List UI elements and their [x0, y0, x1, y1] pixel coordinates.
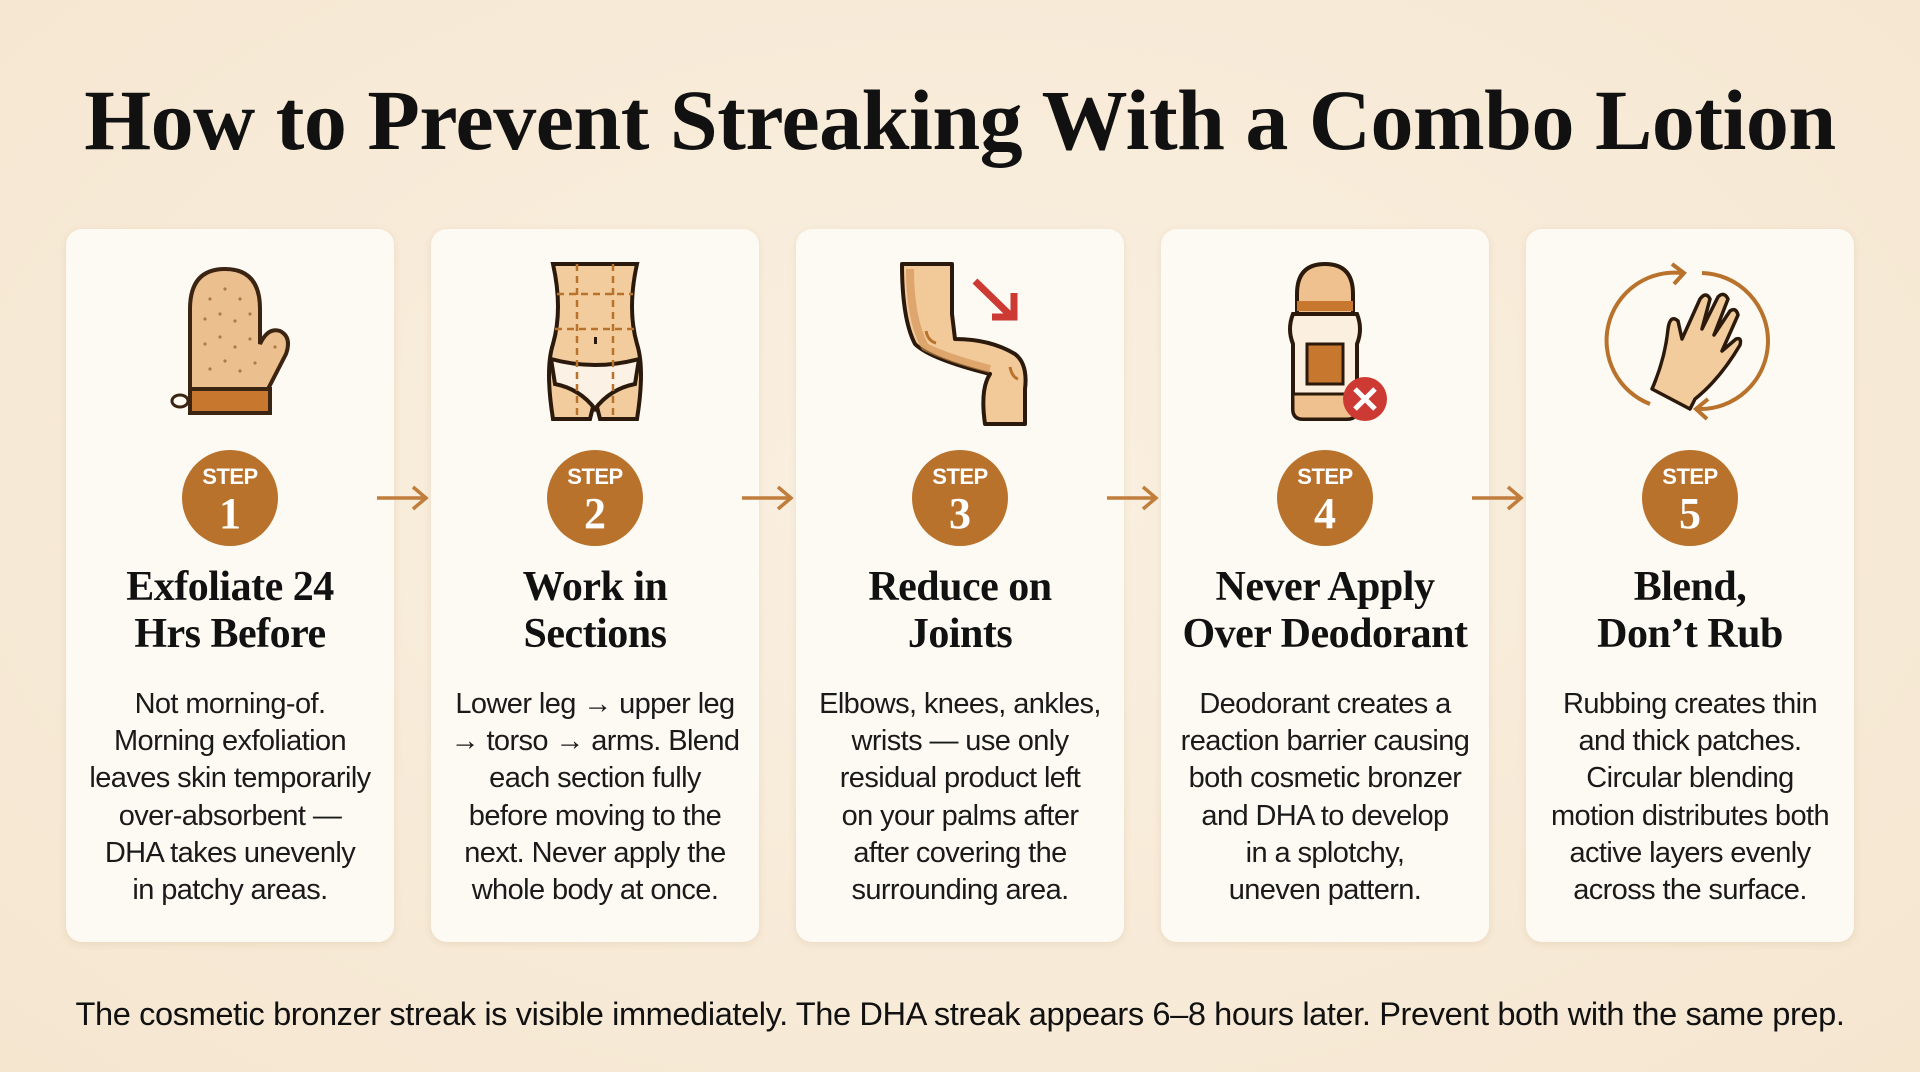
- body text: Rubbing creates thin: [1563, 688, 1817, 720]
- heading: Never Apply: [1216, 564, 1434, 610]
- icon: torso sections: [547, 262, 643, 421]
- icon: elbow/knee joints: [900, 262, 1028, 426]
- panel: step 2: [431, 229, 759, 942]
- body text: Lower leg → upper leg: [455, 688, 735, 720]
- step badge 3: STEP: [932, 464, 988, 489]
- body text: Not morning-of.: [135, 688, 325, 720]
- step badge 1: STEP: [202, 464, 258, 489]
- body text: across the surface.: [1573, 874, 1807, 906]
- step badge 5: [1642, 450, 1738, 546]
- body text: Elbows, knees, ankles,: [819, 688, 1101, 720]
- arrow 1: [377, 486, 429, 510]
- body text: active layers evenly: [1569, 837, 1811, 869]
- step badge 5: STEP: [1662, 464, 1718, 489]
- body text: [451, 688, 739, 906]
- icon: deodorant with X: [1288, 262, 1387, 421]
- body text: [89, 688, 371, 906]
- arrow 4: [1472, 486, 1524, 510]
- body text: whole body at once.: [472, 874, 718, 906]
- arrow 2: [742, 486, 794, 510]
- step badge 3: 3: [949, 489, 971, 538]
- heading: [126, 564, 334, 657]
- step badge 2: STEP: [567, 464, 623, 489]
- heading: Work in: [523, 564, 667, 610]
- heading: Reduce on: [868, 564, 1052, 610]
- panel: step 3: [796, 229, 1124, 942]
- body text: [819, 688, 1101, 906]
- body text: in patchy areas.: [132, 874, 328, 906]
- panel: step 4: [1161, 229, 1489, 942]
- step badge 4: [1277, 450, 1373, 546]
- body text: next. Never apply the: [464, 837, 726, 869]
- body text: [1551, 688, 1829, 906]
- body text: residual product left: [840, 762, 1080, 794]
- heading: Hrs Before: [134, 611, 326, 657]
- body text: reaction barrier causing: [1181, 725, 1469, 757]
- heading: [1597, 564, 1783, 657]
- body text: surrounding area.: [851, 874, 1069, 906]
- step badge 2: 2: [584, 489, 606, 538]
- step badge 3: [912, 450, 1008, 546]
- body text: over-absorbent —: [119, 800, 341, 832]
- heading: Exfoliate 24: [126, 564, 334, 610]
- heading: [523, 564, 668, 657]
- body text: motion distributes both: [1551, 800, 1829, 832]
- step badge 5: 5: [1679, 489, 1701, 538]
- heading: Over Deodorant: [1182, 611, 1468, 657]
- step badge 1: [182, 450, 278, 546]
- arrow 3: [1107, 486, 1159, 510]
- step badge 4: STEP: [1297, 464, 1353, 489]
- body text: and thick patches.: [1579, 725, 1801, 757]
- icon: exfoliating mitt: [170, 267, 290, 415]
- body text: leaves skin temporarily: [89, 762, 371, 794]
- body text: each section fully: [489, 762, 701, 794]
- step badge 4: 4: [1314, 489, 1336, 538]
- step badge 2: [547, 450, 643, 546]
- body text: DHA takes unevenly: [105, 837, 355, 869]
- body text: uneven pattern.: [1229, 874, 1421, 906]
- body text: before moving to the: [469, 800, 721, 832]
- step badge 1: 1: [219, 489, 241, 538]
- body text: Circular blending: [1586, 762, 1794, 794]
- heading: Blend,: [1634, 564, 1746, 610]
- heading: Sections: [524, 611, 666, 657]
- footer note: The cosmetic bronzer streak is visible immediately. The DHA streak appears 6–8 hours later. Prevent both with the same prep.: [76, 995, 1844, 1032]
- body text: → torso → arms. Blend: [451, 725, 739, 757]
- heading: Don’t Rub: [1597, 611, 1783, 657]
- body text: Morning exfoliation: [114, 725, 346, 757]
- body text: both cosmetic bronzer: [1189, 762, 1461, 794]
- body text: in a splotchy,: [1246, 837, 1404, 869]
- body text: [1181, 688, 1469, 906]
- body text: on your palms after: [842, 800, 1078, 832]
- body text: wrists — use only: [851, 725, 1069, 757]
- heading: Joints: [908, 611, 1012, 657]
- title: How to Prevent Streaking With a Combo Lotion: [84, 72, 1836, 168]
- heading: [868, 564, 1052, 657]
- body text: after covering the: [853, 837, 1067, 869]
- icon: hand with circular arrows: [1604, 262, 1770, 420]
- body text: and DHA to develop: [1201, 800, 1449, 832]
- body text: Deodorant creates a: [1199, 688, 1451, 720]
- heading: [1182, 564, 1468, 657]
- panel: step 5: [1526, 229, 1854, 942]
- panel: step 1: [66, 229, 394, 942]
